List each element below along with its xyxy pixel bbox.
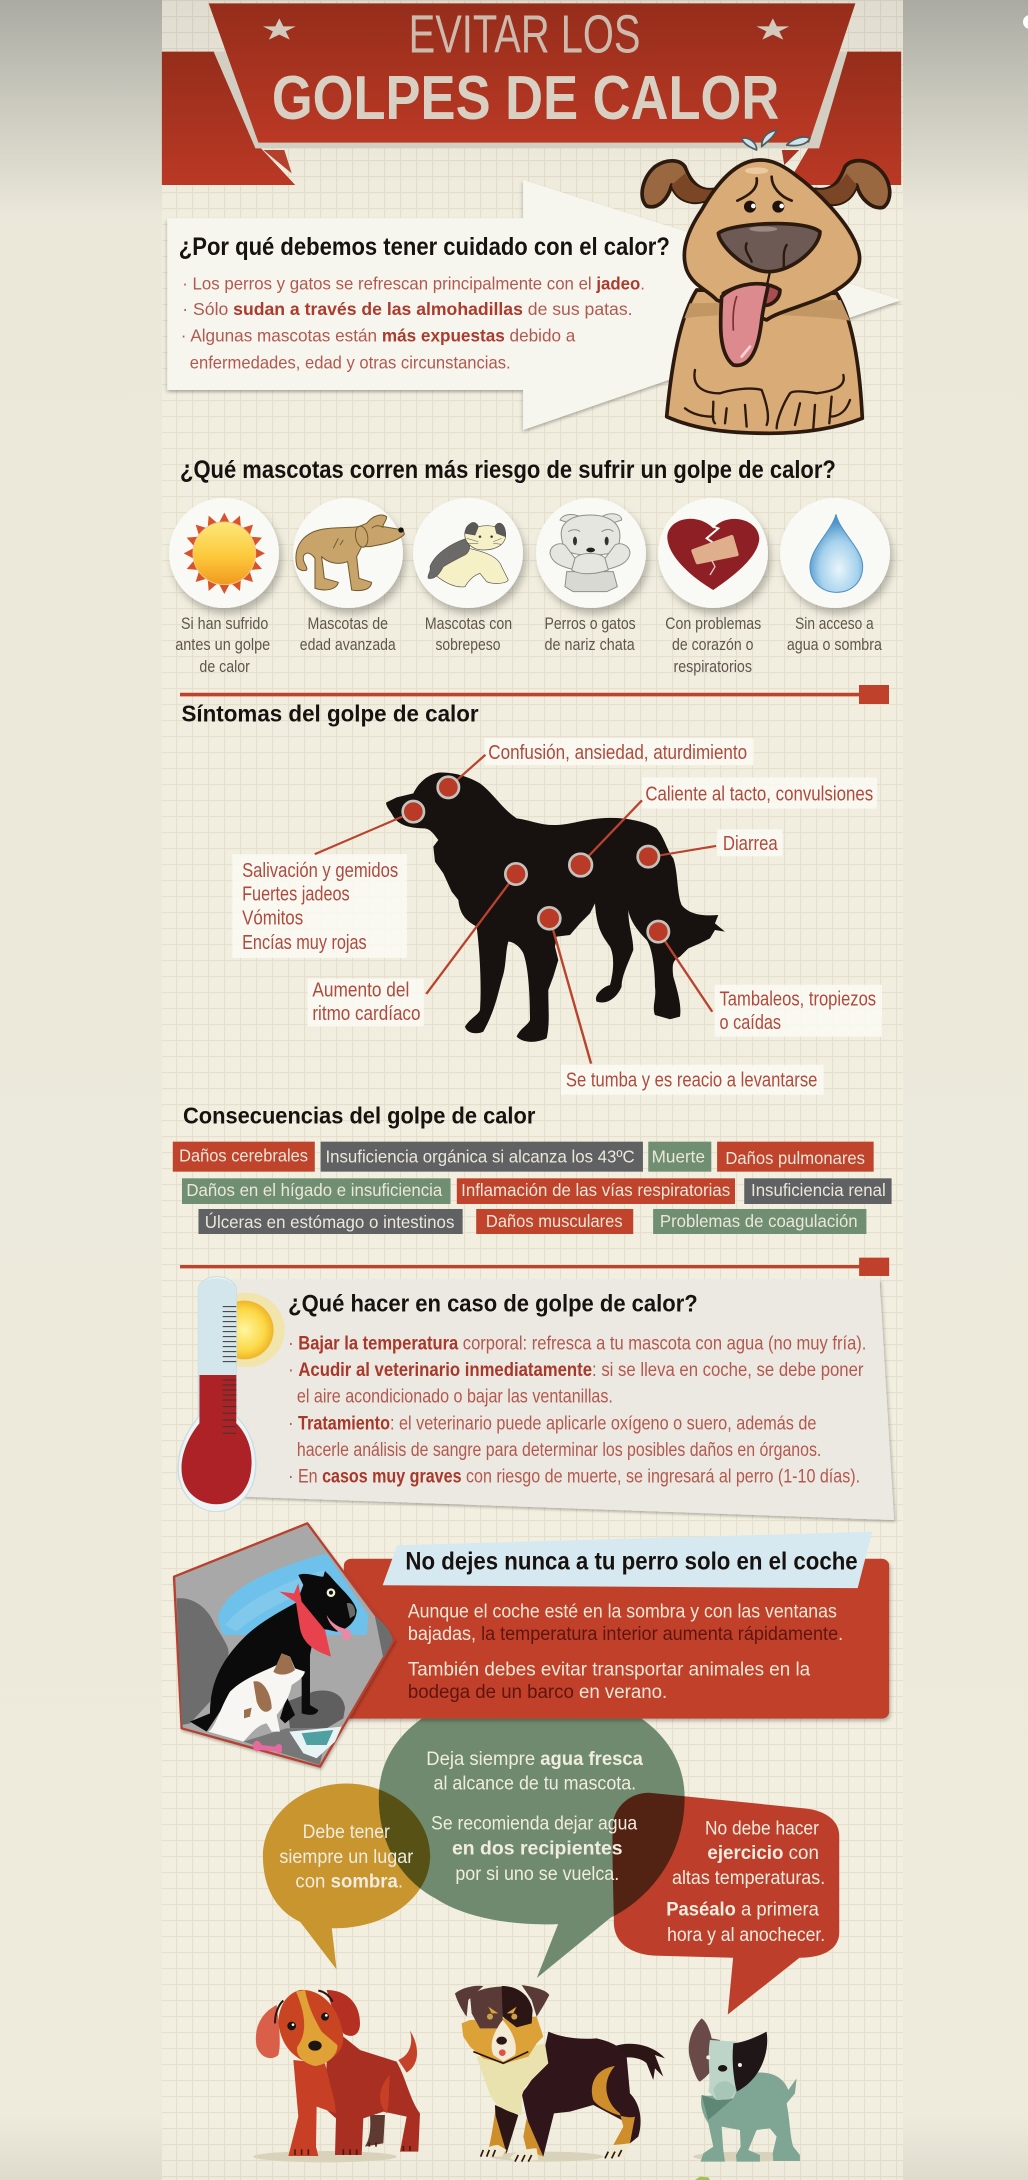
section: pets at risk [169,456,890,675]
water text: Se recomienda dejar agua [431,1812,637,1834]
captions: agua o sombra [787,635,882,654]
water text [426,1747,643,1885]
heading: ¿Qué mascotas corren más riesgo de sufrir un golpe de calor? [180,456,836,484]
captions: de calor [199,656,250,675]
exercise text: altas temperaturas. [672,1866,825,1889]
bubble: exercise [612,1793,839,2015]
white cat [208,1653,305,1742]
tags: Muerte [652,1147,705,1167]
red bandana [279,1583,331,1657]
panel: never leave dog in the car [174,1523,889,1767]
shade text [279,1820,413,1892]
exercise text [666,1817,825,1946]
advice text: el aire acondicionado o bajar las ventanillas. [297,1387,613,1407]
star right [756,18,789,40]
small green mark [695,2177,710,2180]
body text: bodega de un barco en verano. [408,1682,667,1703]
speech bubbles [263,1688,839,2015]
header strip [383,1532,872,1588]
header text: No dejes nunca a tu perro solo en el coche [405,1546,858,1575]
icon: overweight cat [428,522,508,587]
title banner [162,3,901,185]
water text: al alcance de tu mascota. [434,1772,636,1794]
symptom labels: Se tumba y es reacio a levantarse [566,1068,817,1091]
symptom labels: Confusión, ansiedad, aturdimiento [488,740,747,763]
red panel [344,1559,889,1719]
icon: broken heart [667,519,759,590]
water text: por si uno se vuelca. [455,1862,619,1885]
section: what to do [178,1258,894,1520]
exercise text: No debe hacer [705,1817,819,1839]
exercise text: Paséalo a primera [666,1898,819,1920]
symptom labels: Encías muy rojas [242,930,367,953]
bullets: enfermedades, edad y otras circunstancias. [190,352,511,372]
icon: water drop [810,514,863,592]
captions: Mascotas con [425,613,512,633]
body text: bajadas, la temperatura interior aumenta rápidamente. [408,1624,843,1645]
illustration: three dogs [253,1985,800,2180]
illustration: dog and cat in car [174,1523,394,1767]
tags [173,1142,892,1234]
captions: de nariz chata [545,635,635,654]
section: symptoms [180,685,889,1095]
symptom labels: Caliente al tacto, convulsiones [645,782,873,805]
icon: sad panting dog [642,130,890,433]
dog: red [253,1990,420,2162]
captions: Mascotas de [308,613,388,633]
captions: Con problemas [665,613,761,633]
symptom labels: Fuertes jadeos [242,882,350,905]
dog: french bulldog [689,2018,800,2162]
icon: sun [184,513,265,594]
icon: flat-nosed dog [550,514,630,592]
advice text: · Acudir al veterinario inmediatamente: si se lleva en coche, se debe poner [288,1360,864,1381]
leader lines [315,755,716,1064]
captions: sobrepeso [435,635,500,654]
shade text: siempre un lugar [279,1845,413,1868]
tags: Daños pulmonares [725,1148,865,1168]
symptom labels: ritmo cardíaco [312,1002,420,1025]
heading: ¿Qué hacer en caso de golpe de calor? [288,1291,698,1317]
symptom labels: Diarrea [723,832,778,855]
bubble text [279,1747,825,1946]
panel: why care about heat [167,180,901,430]
body text: Aunque el coche esté en la sombra y con las ventanas [408,1602,837,1622]
label boxes [232,738,882,1095]
icon: old dog [296,515,404,591]
bullets: · Algunas mascotas están más expuestas debido a [181,325,576,346]
captions: Perros o gatos [545,613,636,633]
captions [175,613,882,675]
bullets: · Sólo sudan a través de las almohadillas de sus patas. [182,298,633,319]
symptom labels: Tambaleos, tropiezos [720,987,876,1010]
heading: Consecuencias del golpe de calor [183,1103,535,1129]
tags: Inflamación de las vías respiratorias [461,1180,730,1200]
shade text: con sombra. [295,1870,403,1892]
body text [408,1602,843,1703]
tags: Daños cerebrales [179,1146,308,1166]
water text: en dos recipientes [452,1837,623,1859]
symptom labels: Vómitos [242,906,303,929]
symptom markers [403,777,669,942]
paper panel [232,1279,894,1520]
captions: edad avanzada [300,635,396,654]
water tray [289,1727,342,1758]
tags: Úlceras en estómago o intestinos [205,1212,454,1232]
circle backgrounds [169,498,890,608]
heading: Síntomas del golpe de calor [182,701,479,727]
symptom labels [242,740,876,1091]
symptom labels: Salivación y gemidos [242,859,398,882]
black dog [190,1571,357,1732]
bubble: water [379,1688,685,1978]
bone toy [253,1741,282,1753]
title: evitar los: EVITAR LOS [409,5,640,64]
bubble: shade [263,1783,430,1970]
tags: Daños musculares [486,1211,623,1231]
symptom labels: o caídas [720,1011,781,1034]
bullets [181,273,645,372]
advice text [288,1333,866,1487]
captions: Si han sufrido [181,613,268,633]
exercise text: ejercicio con [707,1841,819,1863]
section: consequences [173,1103,892,1234]
tags: Daños en el hígado e insuficiencia [186,1180,443,1200]
tags: Insuficiencia orgánica si alcanza los 43ºC [325,1147,635,1167]
water text: Deja siempre agua fresca [426,1747,643,1770]
icon: sun behind thermometer [209,1293,285,1367]
tags: Problemas de coagulación [660,1211,858,1231]
symptom labels: Aumento del [312,978,409,1001]
star left [263,18,296,40]
exercise text: hora y al anochecer. [667,1923,825,1946]
tags: Insuficiencia renal [751,1180,886,1200]
captions: respiratorios [673,656,752,675]
body text: También debes evitar transportar animales en la [408,1660,811,1680]
icon: thermometer [178,1277,256,1512]
captions: de corazón o [672,635,753,654]
captions: antes un golpe [175,635,270,654]
dog: tricolor [455,1985,665,2162]
bullets: · Los perros y gatos se refrescan principalmente con el jadeo. [182,273,645,293]
sweat drops [742,130,810,150]
shade text: Debe tener [303,1820,390,1842]
heading: ¿Por qué debemos tener cuidado con el calor? [179,232,670,260]
dog silhouette [386,773,725,1042]
captions: Sin acceso a [795,613,874,633]
